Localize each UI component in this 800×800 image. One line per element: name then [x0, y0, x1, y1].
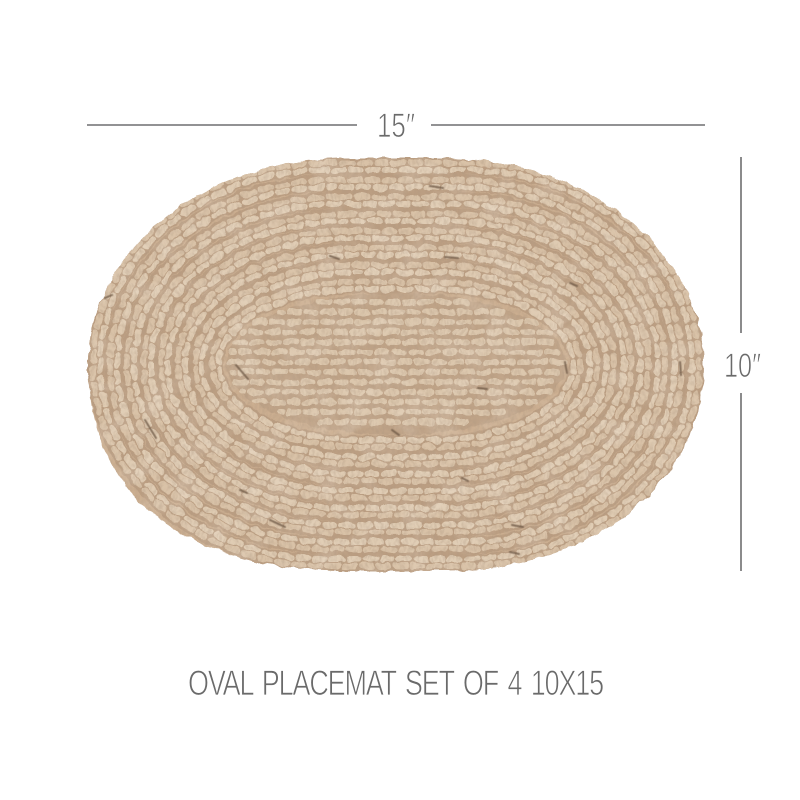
dark fibre flecks: [105, 186, 681, 554]
fine fibre shading: [88, 158, 704, 571]
oval braided jute placemat: [88, 158, 704, 571]
centre oval braid: [226, 293, 566, 435]
height dimension: 10 inches: 10″: [724, 347, 761, 385]
product caption: OVAL PLACEMAT SET OF 4 10X15: [188, 664, 603, 703]
outer braid rings: [93, 163, 699, 566]
mottled fibre highlights: [88, 158, 704, 571]
width dimension: 15 inches: 15″: [377, 107, 415, 145]
